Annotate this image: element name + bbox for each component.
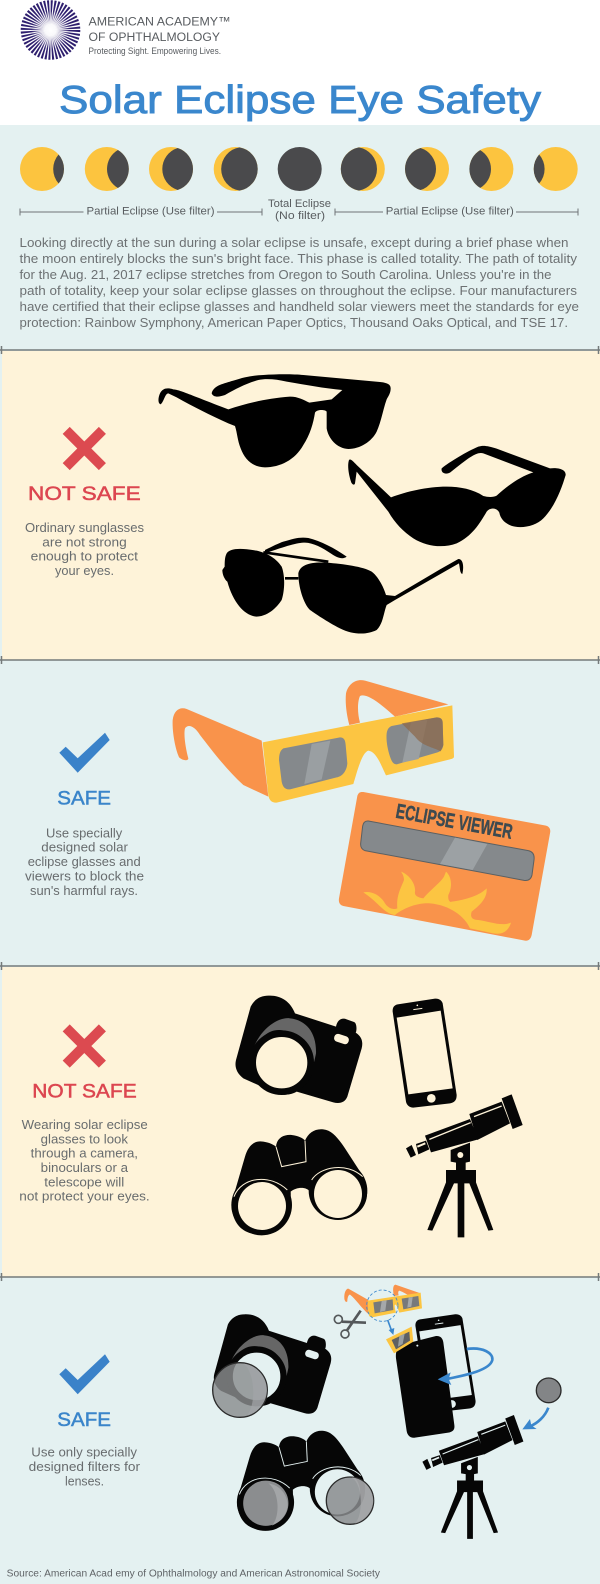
icon: telescope [406, 1094, 523, 1237]
description: binoculars or a [41, 1160, 129, 1175]
icon: eclipse viewer card [339, 792, 550, 941]
heading: safe: SAFE [57, 1409, 111, 1431]
panel: safe, filters [0, 1273, 600, 1584]
description: telescope will [44, 1174, 124, 1189]
description: Wearing solar eclipse [22, 1117, 148, 1132]
icon: phone with filter [396, 1314, 476, 1438]
panel: not safe, optical devices [0, 962, 600, 1277]
icon: red cross [66, 430, 102, 467]
panel: eclipse phases [0, 125, 600, 350]
logo wordmark: AMERICAN ACADEMY™ [88, 15, 230, 29]
device silhouettes [231, 996, 523, 1237]
illustration group [173, 680, 550, 941]
description: eclipse glasses and [28, 854, 141, 869]
icon: eclipse glasses [173, 680, 454, 803]
intro paragraph: have certified that their eclipse glasses and handheld solar viewers meet the standards for eye [20, 299, 579, 314]
icon: smartphone [393, 999, 457, 1108]
viewer card label: ECLIPSE VIEWER [394, 800, 514, 844]
icon: tiny eclipse glasses [344, 1285, 422, 1321]
description: designed filters for [29, 1459, 141, 1474]
description: lenses. [65, 1473, 104, 1488]
eclipse phase row [20, 147, 578, 191]
intro paragraph: the moon entirely blocks the sun's bright face. This phase is called totality. The path of totality [20, 251, 578, 266]
phase labels [20, 198, 578, 222]
intro paragraph: for the Aug. 21, 2017 eclipse stretches from Oregon to South Carolina. Unless you're in the [20, 267, 552, 282]
icon: starburst [21, 0, 80, 60]
description: enough to protect [31, 549, 138, 564]
panel: not safe, sunglasses [0, 346, 600, 660]
phase labels: Partial Eclipse (Use filter) [386, 206, 514, 218]
source line: Source: American Acad emy of Ophthalmology and American Astronomical Society [7, 1569, 380, 1580]
heading: not safe: NOT SAFE [32, 1080, 137, 1102]
heading: not safe: NOT SAFE [28, 483, 141, 505]
description: designed solar [41, 840, 129, 855]
sunglasses silhouettes [158, 374, 566, 634]
description: your eyes. [55, 563, 114, 578]
icon: camera [235, 996, 362, 1103]
icon: telescope with filter [422, 1415, 523, 1539]
description [29, 1445, 141, 1488]
logo: American Academy of Ophthalmology [21, 0, 231, 60]
heading: safe: SAFE [57, 787, 111, 809]
icon: scissors [334, 1311, 366, 1338]
description: not protect your eyes. [19, 1189, 150, 1204]
cutting step: glasses, scissors, cut lens [334, 1285, 422, 1353]
description: through a camera, [31, 1146, 138, 1161]
description: Ordinary sunglasses [25, 520, 144, 535]
logo wordmark [88, 15, 230, 56]
logo wordmark: Protecting Sight. Empowering Lives. [88, 46, 221, 56]
arrow: filter to telescope [522, 1408, 548, 1429]
icon: cat-eye sunglasses [348, 446, 566, 546]
icon: aviator sunglasses [222, 538, 463, 634]
icon: telescope filter disc [536, 1378, 561, 1403]
icon: binoculars [231, 1129, 367, 1235]
arrow: lens to phone [388, 1320, 394, 1335]
intro paragraph: protection: Rainbow Symphony, American Paper Optics, Thousand Oaks Optical, and TSE 17. [20, 315, 568, 330]
description: are not strong [42, 534, 127, 549]
intro paragraph [20, 235, 579, 330]
logo wordmark: OF OPHTHALMOLOGY [88, 30, 220, 44]
icon: camera with filter [213, 1314, 331, 1417]
phase labels: Total Eclipse [268, 198, 331, 210]
description: Use only specially [31, 1445, 137, 1460]
icon: blue check [59, 733, 110, 773]
title: Solar Eclipse Eye Safety [59, 79, 542, 122]
panel: safe, eclipse glasses and viewer [0, 656, 600, 966]
description [25, 520, 144, 578]
phase labels: Partial Eclipse (Use filter) [86, 206, 214, 218]
description: sun's harmful rays. [30, 883, 138, 898]
icon: wayfarer sunglasses [158, 374, 391, 467]
icon: blue check [59, 1354, 110, 1394]
phase labels: (No filter) [275, 210, 325, 222]
description [19, 1117, 150, 1204]
icon: binoculars with filters [237, 1431, 374, 1531]
arrow: rotate phone [438, 1349, 492, 1385]
description: viewers to block the [25, 868, 144, 884]
intro paragraph: path of totality, keep your solar eclipse glasses on throughout the eclipse. Four manufacturers [20, 283, 577, 298]
description: glasses to look [41, 1131, 128, 1146]
filtered devices [213, 1314, 561, 1539]
intro paragraph: Looking directly at the sun during a solar eclipse is unsafe, except during a brief phase when [20, 235, 568, 250]
description: Use specially [46, 825, 123, 840]
description [25, 825, 144, 898]
icon: red cross [66, 1028, 102, 1064]
icon: cut glasses lens [386, 1327, 413, 1353]
